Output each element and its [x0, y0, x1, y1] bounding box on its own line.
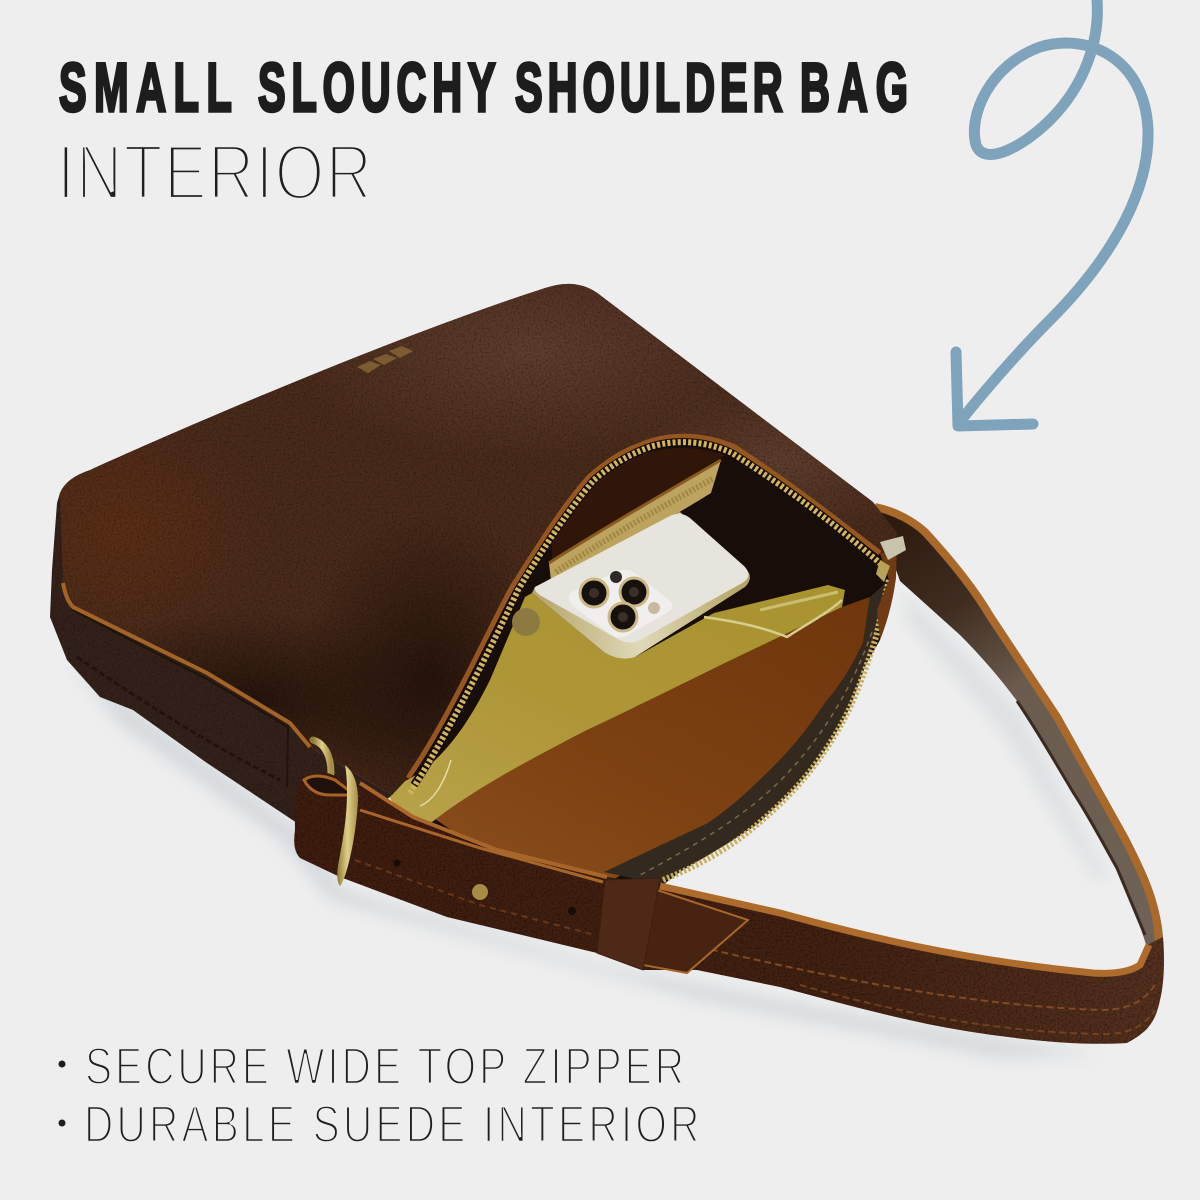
gold pouch — [380, 585, 845, 822]
strap edges — [360, 783, 607, 877]
leather edge right of the opening — [877, 538, 897, 640]
pouch strap highlight — [760, 592, 838, 610]
title: SMALL — [59, 49, 232, 127]
top zipper teeth — [410, 442, 882, 793]
bullet point 1 — [58, 1060, 66, 1068]
holes — [394, 860, 400, 866]
smartphone — [532, 512, 750, 659]
bag photo illustration — [0, 240, 1170, 1058]
tape stitching — [640, 632, 872, 875]
feature list — [58, 1037, 699, 1153]
title: SLOUCHY — [258, 49, 496, 127]
shoulder strap back section — [873, 505, 1163, 948]
lenses — [580, 578, 648, 631]
title: BAG — [800, 49, 908, 127]
lower leather panel — [50, 493, 392, 822]
title — [59, 49, 908, 127]
zipper tape on flap — [604, 580, 889, 884]
pouch flap seam — [704, 600, 842, 637]
title: SHOULDER — [515, 49, 783, 127]
soft shadows — [70, 590, 1110, 1058]
interior dark cavity — [395, 437, 892, 885]
zipper pull — [876, 536, 906, 582]
pouch corner stitch — [420, 760, 451, 806]
brand rivets — [357, 346, 413, 373]
rear wall above pocket — [552, 448, 725, 570]
bag upper leather panel — [60, 284, 897, 795]
front ring — [337, 765, 358, 886]
icon: blue hand-drawn arrow — [956, 0, 1148, 426]
loop opening — [304, 776, 355, 795]
zipped back pocket — [549, 460, 721, 590]
keeper loop — [597, 878, 660, 970]
feature line 1: SECURE WIDE TOP ZIPPER — [85, 1037, 684, 1095]
flap zipper teeth — [663, 580, 889, 880]
bullet point 2 — [58, 1120, 66, 1126]
front strap with buckle end — [285, 765, 1170, 1050]
strap stitching — [700, 947, 1155, 1010]
flash and sensor — [648, 602, 660, 614]
heading block — [57, 49, 908, 216]
opening leather edge — [408, 436, 880, 778]
back ring — [313, 740, 331, 796]
snap button — [512, 608, 540, 636]
camera module — [569, 570, 673, 638]
suede interior flap — [436, 597, 870, 878]
feature line 2: DURABLE SUEDE INTERIOR — [84, 1095, 699, 1153]
brass stud — [472, 884, 488, 900]
subtitle: INTERIOR — [57, 129, 372, 216]
strap tip — [643, 890, 748, 973]
